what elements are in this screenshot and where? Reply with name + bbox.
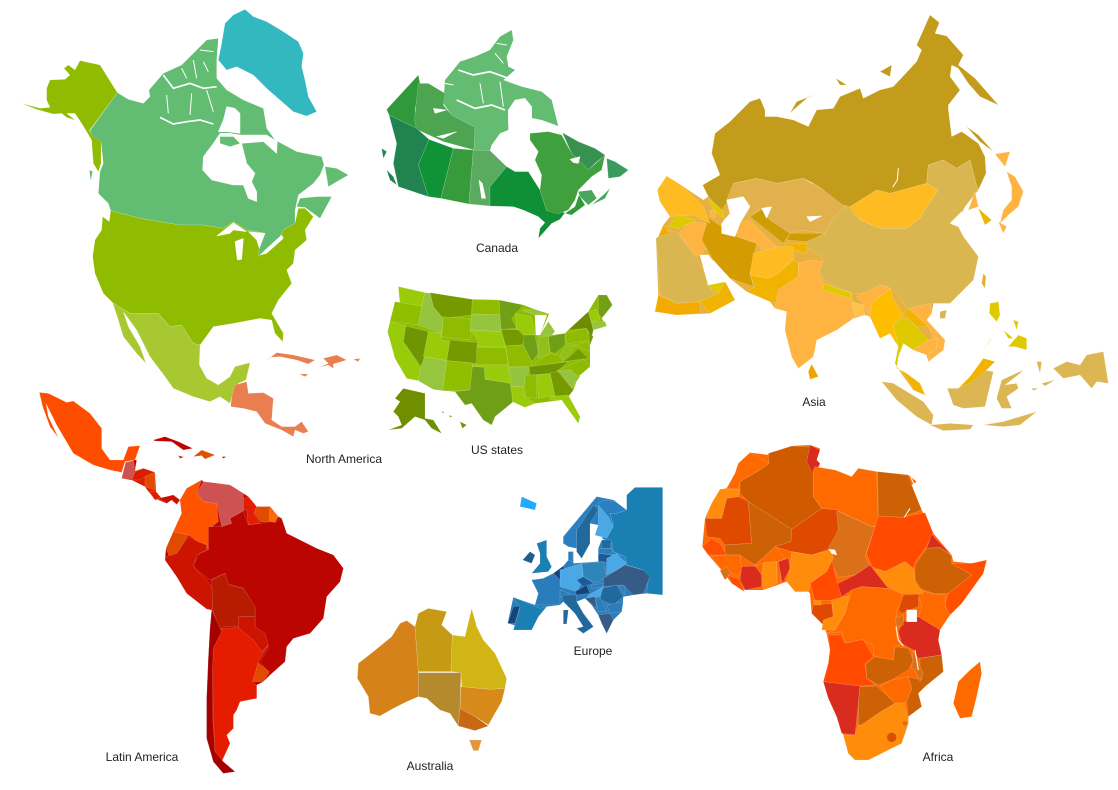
region: Argentina xyxy=(213,628,268,762)
region: Turkey xyxy=(657,176,710,223)
region: Iran xyxy=(702,217,757,287)
region: South Africa xyxy=(843,703,908,760)
state: Hawaii xyxy=(460,422,467,428)
region: India xyxy=(775,260,853,368)
region: Arabia xyxy=(656,230,718,303)
region: Southeast Asia xyxy=(870,288,945,395)
region: Central Asia xyxy=(737,209,825,253)
region: Mozambique xyxy=(907,655,943,717)
region: Ukraine xyxy=(603,565,650,595)
region: United States xyxy=(93,208,313,345)
region: Kazakhstan xyxy=(727,178,845,233)
region: Baltic states xyxy=(598,540,613,563)
region: Newfoundland xyxy=(607,158,628,178)
region: Sri Lanka xyxy=(808,364,818,379)
region: Philippines xyxy=(983,302,1027,351)
region: Central America xyxy=(122,460,180,504)
region: Scandinavia base xyxy=(563,497,627,558)
region: Peru xyxy=(165,537,213,610)
map: Australia xyxy=(357,608,507,751)
region: Tasmania xyxy=(469,740,482,751)
label: Africa: Africa xyxy=(923,750,954,764)
region: Western Australia xyxy=(357,621,418,716)
region: Greece xyxy=(598,613,613,633)
region: Egypt xyxy=(878,472,922,517)
region: Mexico xyxy=(113,303,250,403)
region: Africa base xyxy=(702,445,987,760)
region: Mali xyxy=(725,502,792,565)
region: Namibia xyxy=(823,682,860,735)
state: Alaska xyxy=(388,388,442,433)
region: France xyxy=(532,573,563,605)
region: Mongolia xyxy=(850,183,938,228)
region: Canada xyxy=(89,38,348,257)
state: Florida xyxy=(550,395,580,423)
region: US base xyxy=(388,287,612,425)
region: Central America xyxy=(231,382,308,437)
region: United Kingdom xyxy=(532,540,552,573)
region: Indonesia xyxy=(882,352,1108,431)
region: West Africa xyxy=(702,538,790,592)
label: Europe: Europe xyxy=(574,644,613,658)
region: Swaziland xyxy=(903,721,907,726)
label: Canada: Canada xyxy=(476,241,518,255)
map: Latin America xyxy=(39,392,343,773)
region: Ethiopia xyxy=(915,547,972,594)
region: Libya xyxy=(813,467,878,527)
region: Chad xyxy=(828,511,875,577)
region: New South Wales xyxy=(460,687,505,725)
map: Africa xyxy=(702,445,987,760)
region: Tanzania xyxy=(898,617,942,658)
region: Manitoba xyxy=(469,150,507,206)
region: Arctic islands and Nunavut xyxy=(443,30,558,151)
region: Algeria xyxy=(740,446,822,529)
region: Niger xyxy=(775,508,838,555)
region: Madagascar xyxy=(953,662,982,718)
region: Greenland xyxy=(218,9,317,116)
region: Somalia xyxy=(945,560,987,617)
region: Lesotho xyxy=(887,733,896,742)
map: Canada provinces xyxy=(382,30,628,238)
region: Ontario xyxy=(490,167,565,238)
label: Australia: Australia xyxy=(407,759,454,773)
region: Pakistan xyxy=(747,260,798,303)
region: Victoria xyxy=(458,708,488,731)
region: Hudson Bay xyxy=(203,133,277,202)
region: Central America base xyxy=(122,460,180,504)
region: Venezuela xyxy=(197,482,243,527)
region: Great Lakes xyxy=(217,223,283,260)
region: Angola xyxy=(823,635,875,686)
region: Colombia xyxy=(173,480,218,550)
region: Ecuador xyxy=(166,532,188,558)
region: Iceland xyxy=(520,497,537,510)
region: Korea xyxy=(968,192,978,210)
region: Sudan xyxy=(867,513,933,572)
state: Texas xyxy=(455,367,513,425)
region: Afghanistan xyxy=(750,247,793,278)
region: Maritimes xyxy=(565,188,610,215)
region: Queensland xyxy=(451,608,507,689)
region: South Australia xyxy=(418,673,461,726)
region: Iraq xyxy=(678,222,707,257)
region: Chile xyxy=(207,610,235,773)
map: Asia xyxy=(655,15,1108,431)
region: Asia base xyxy=(655,176,978,395)
region: continental base xyxy=(508,540,650,633)
map: Europe xyxy=(508,487,663,633)
region: South America base xyxy=(165,480,343,773)
region: Lake Michigan xyxy=(535,315,547,335)
region: Alaska xyxy=(22,61,117,172)
region: Northern Territory xyxy=(415,608,452,672)
region: Spain xyxy=(513,597,547,630)
label: US states: US states xyxy=(471,443,523,457)
region: Lake Victoria xyxy=(907,610,917,622)
region: China xyxy=(805,160,978,312)
region: Saskatchewan xyxy=(441,148,473,204)
region: Scandinavia xyxy=(563,497,617,558)
region: Yukon xyxy=(387,75,420,128)
region: Caribbean xyxy=(267,353,360,377)
region: Bolivia xyxy=(212,573,255,632)
region: Nigeria xyxy=(787,550,833,592)
region: Russia xyxy=(602,487,663,595)
region: Paraguay xyxy=(238,617,268,652)
region: Poland xyxy=(582,562,607,583)
region: Quebec xyxy=(530,132,605,214)
map: North America xyxy=(22,9,360,437)
region: Mexico xyxy=(39,392,140,472)
label: Asia: Asia xyxy=(802,395,826,409)
region: Italy xyxy=(562,595,593,633)
region: Labrador xyxy=(562,133,605,170)
label: Latin America: Latin America xyxy=(106,750,179,764)
region: Japan xyxy=(995,152,1023,233)
region: Russia xyxy=(703,15,998,210)
map: US states xyxy=(388,287,612,433)
region: DR Congo xyxy=(827,587,903,660)
label: North America: North America xyxy=(306,452,382,466)
region: Northwest Territories xyxy=(414,83,475,150)
region: Caspian Sea xyxy=(722,197,750,237)
region: Alberta xyxy=(418,139,453,198)
region: Caribbean xyxy=(153,437,227,459)
region: Uruguay xyxy=(253,662,269,682)
region: Brazil xyxy=(193,511,343,675)
region: British Columbia xyxy=(389,115,429,197)
region: Germany xyxy=(560,563,583,592)
